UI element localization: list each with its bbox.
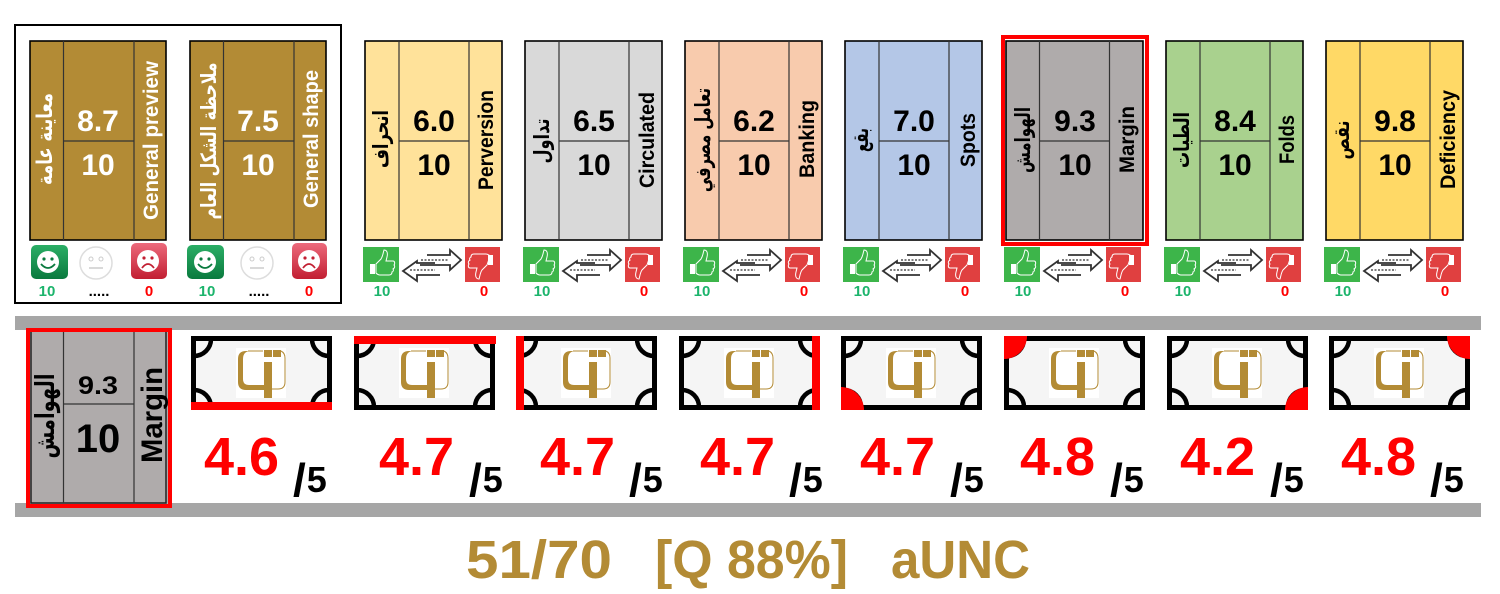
card: folds: Folds — [1276, 115, 1299, 164]
banknote diagram: bottom right corner — [1170, 338, 1308, 410]
rating icons: general shape: 10 — [199, 283, 215, 300]
card: general shape — [190, 41, 326, 240]
card: spots — [845, 41, 982, 240]
score: 4.2 bottom right: 5 — [1284, 459, 1304, 500]
rating icons: general shape: 0 — [305, 283, 313, 300]
banknote diagram: bottom edge — [191, 338, 332, 410]
score: 4.7 top — [379, 427, 503, 506]
score: 4.8 top right: / — [1430, 454, 1443, 506]
card: perversion — [365, 41, 502, 240]
card: margin, highlighted — [1003, 37, 1147, 244]
score: 4.6: / — [293, 454, 306, 506]
votes: margin: 10 — [1015, 283, 1031, 300]
divider bar: top — [15, 316, 1481, 330]
score: 4.7 right: 4.7 — [700, 427, 775, 487]
card: deficiency: 10 — [1378, 149, 1412, 182]
card: general shape: 10 — [241, 149, 275, 182]
score: 4.7 right — [700, 427, 823, 506]
card: deficiency: Deficiency — [1437, 90, 1460, 189]
final grade line: 51/70 — [466, 530, 612, 590]
score: 4.2 bottom right — [1180, 427, 1304, 506]
card: deficiency: نقص — [1330, 120, 1354, 160]
score: 4.7 bottom left: 5 — [964, 459, 984, 500]
votes: spots: 10 — [854, 283, 870, 300]
banknote diagram: top edge — [354, 336, 496, 408]
score: 4.7 right: / — [789, 454, 802, 506]
card: perversion: 6.0 — [413, 105, 455, 138]
score: 4.7 left — [540, 427, 663, 506]
score: 4.8 top left: / — [1110, 454, 1123, 506]
card: general shape: 7.5 — [237, 105, 279, 138]
card: circulated — [525, 41, 662, 240]
score: 4.7 top: / — [469, 454, 482, 506]
score: 4.7 bottom left: / — [950, 454, 963, 506]
card: banking: Banking — [796, 100, 819, 178]
score: 4.8 top right: 4.8 — [1341, 427, 1416, 487]
card: folds — [1166, 41, 1303, 240]
card: spots: 7.0 — [893, 105, 935, 138]
banknote diagram: right edge — [682, 336, 820, 410]
votes: spots — [843, 247, 980, 300]
card: spots: بقع — [849, 128, 873, 152]
card: circulated: Circulated — [636, 92, 659, 188]
score: 4.7 top: 5 — [483, 459, 503, 500]
score: 4.8 top left — [1020, 427, 1144, 506]
rating icons: general preview: ..... — [89, 283, 109, 300]
card: margin summary: Margin — [136, 367, 169, 463]
final grade line: [Q 88%] — [655, 530, 848, 590]
final grade line: aUNC — [891, 530, 1030, 590]
card: general shape: ملاحظة الشكل العام — [197, 62, 221, 220]
votes: deficiency — [1324, 247, 1461, 300]
score: 4.7 left: / — [629, 454, 642, 506]
card: folds: 10 — [1218, 149, 1252, 182]
card: margin summary: 9.3 — [78, 372, 118, 400]
card: banking: 10 — [737, 149, 771, 182]
votes: circulated: 0 — [640, 283, 648, 300]
card: general shape: General shape — [300, 70, 323, 208]
card: margin summary — [28, 330, 170, 506]
score: 4.7 top: 4.7 — [379, 427, 454, 487]
card: banking — [685, 41, 822, 240]
card: general preview — [30, 41, 166, 240]
banknote diagram: top right corner — [1332, 336, 1470, 408]
card: general preview: معاينة عامة — [33, 93, 58, 185]
rating icons: general preview — [31, 243, 167, 300]
score: 4.2 bottom right: / — [1270, 454, 1283, 506]
score: 4.7 right: 5 — [803, 459, 823, 500]
votes: margin — [1004, 247, 1141, 300]
rating icons: general shape: ..... — [249, 283, 269, 300]
votes: deficiency: 0 — [1441, 283, 1449, 300]
card: margin, highlighted: 10 — [1058, 149, 1092, 182]
final grade line — [466, 530, 1030, 590]
card: perversion: 10 — [417, 149, 451, 182]
card: margin summary: الهوامش — [31, 374, 61, 458]
score: 4.7 left: 4.7 — [540, 427, 615, 487]
score: 4.8 top right — [1341, 427, 1464, 506]
card: banking: تعامل مصرفي — [691, 88, 715, 192]
card: deficiency: 9.8 — [1374, 105, 1416, 138]
score: 4.6: 5 — [307, 459, 327, 500]
votes: folds: 0 — [1281, 283, 1289, 300]
votes: perversion: 0 — [480, 283, 488, 300]
card: circulated: 10 — [577, 149, 611, 182]
score: 4.7 bottom left — [860, 427, 984, 506]
rating icons: general preview: 10 — [39, 283, 55, 300]
card: spots: 10 — [897, 149, 931, 182]
votes: spots: 0 — [961, 283, 969, 300]
votes: folds — [1164, 247, 1301, 300]
card: margin, highlighted: 9.3 — [1054, 105, 1096, 138]
card: folds: 8.4 — [1214, 105, 1256, 138]
votes: circulated — [523, 247, 660, 300]
score: 4.8 top left: 5 — [1124, 459, 1144, 500]
card: general preview: 10 — [81, 149, 115, 182]
card: general preview: General preview — [140, 60, 163, 220]
score: 4.2 bottom right: 4.2 — [1180, 427, 1255, 487]
card: circulated: 6.5 — [573, 105, 615, 138]
panel: overall ratings frame — [15, 25, 341, 303]
banknote diagram: top left corner — [1004, 336, 1142, 408]
banknote diagram: left edge — [516, 336, 654, 410]
votes: perversion: 10 — [374, 283, 390, 300]
score: 4.6 — [204, 427, 327, 506]
votes: deficiency: 10 — [1335, 283, 1351, 300]
divider bar: bottom — [15, 503, 1481, 517]
votes: banking: 10 — [694, 283, 710, 300]
score: 4.7 bottom left: 4.7 — [860, 427, 935, 487]
card: margin summary: 10 — [76, 417, 120, 461]
score: 4.6: 4.6 — [204, 427, 279, 487]
card: margin, highlighted: Margin — [1116, 106, 1139, 173]
votes: margin: 0 — [1121, 283, 1129, 300]
card: circulated: تداول — [530, 118, 554, 164]
score: 4.7 left: 5 — [643, 459, 663, 500]
votes: perversion — [363, 247, 500, 300]
rating icons: general preview: 0 — [145, 283, 153, 300]
banknote diagram: bottom left corner — [841, 338, 980, 410]
card: general preview: 8.7 — [77, 105, 119, 138]
votes: circulated: 10 — [534, 283, 550, 300]
card: margin, highlighted: الهوامش — [1011, 107, 1035, 173]
card: perversion: انحراف — [369, 110, 393, 168]
card: banking: 6.2 — [733, 105, 775, 138]
votes: banking: 0 — [800, 283, 808, 300]
score: 4.8 top right: 5 — [1444, 459, 1464, 500]
card: spots: Spots — [957, 113, 980, 167]
card: perversion: Perversion — [475, 90, 498, 190]
score: 4.8 top left: 4.8 — [1020, 427, 1095, 487]
votes: folds: 10 — [1175, 283, 1191, 300]
votes: banking — [683, 247, 820, 300]
rating icons: general shape — [187, 243, 327, 300]
card: deficiency — [1326, 41, 1463, 240]
card: folds: الطيات — [1170, 112, 1194, 168]
